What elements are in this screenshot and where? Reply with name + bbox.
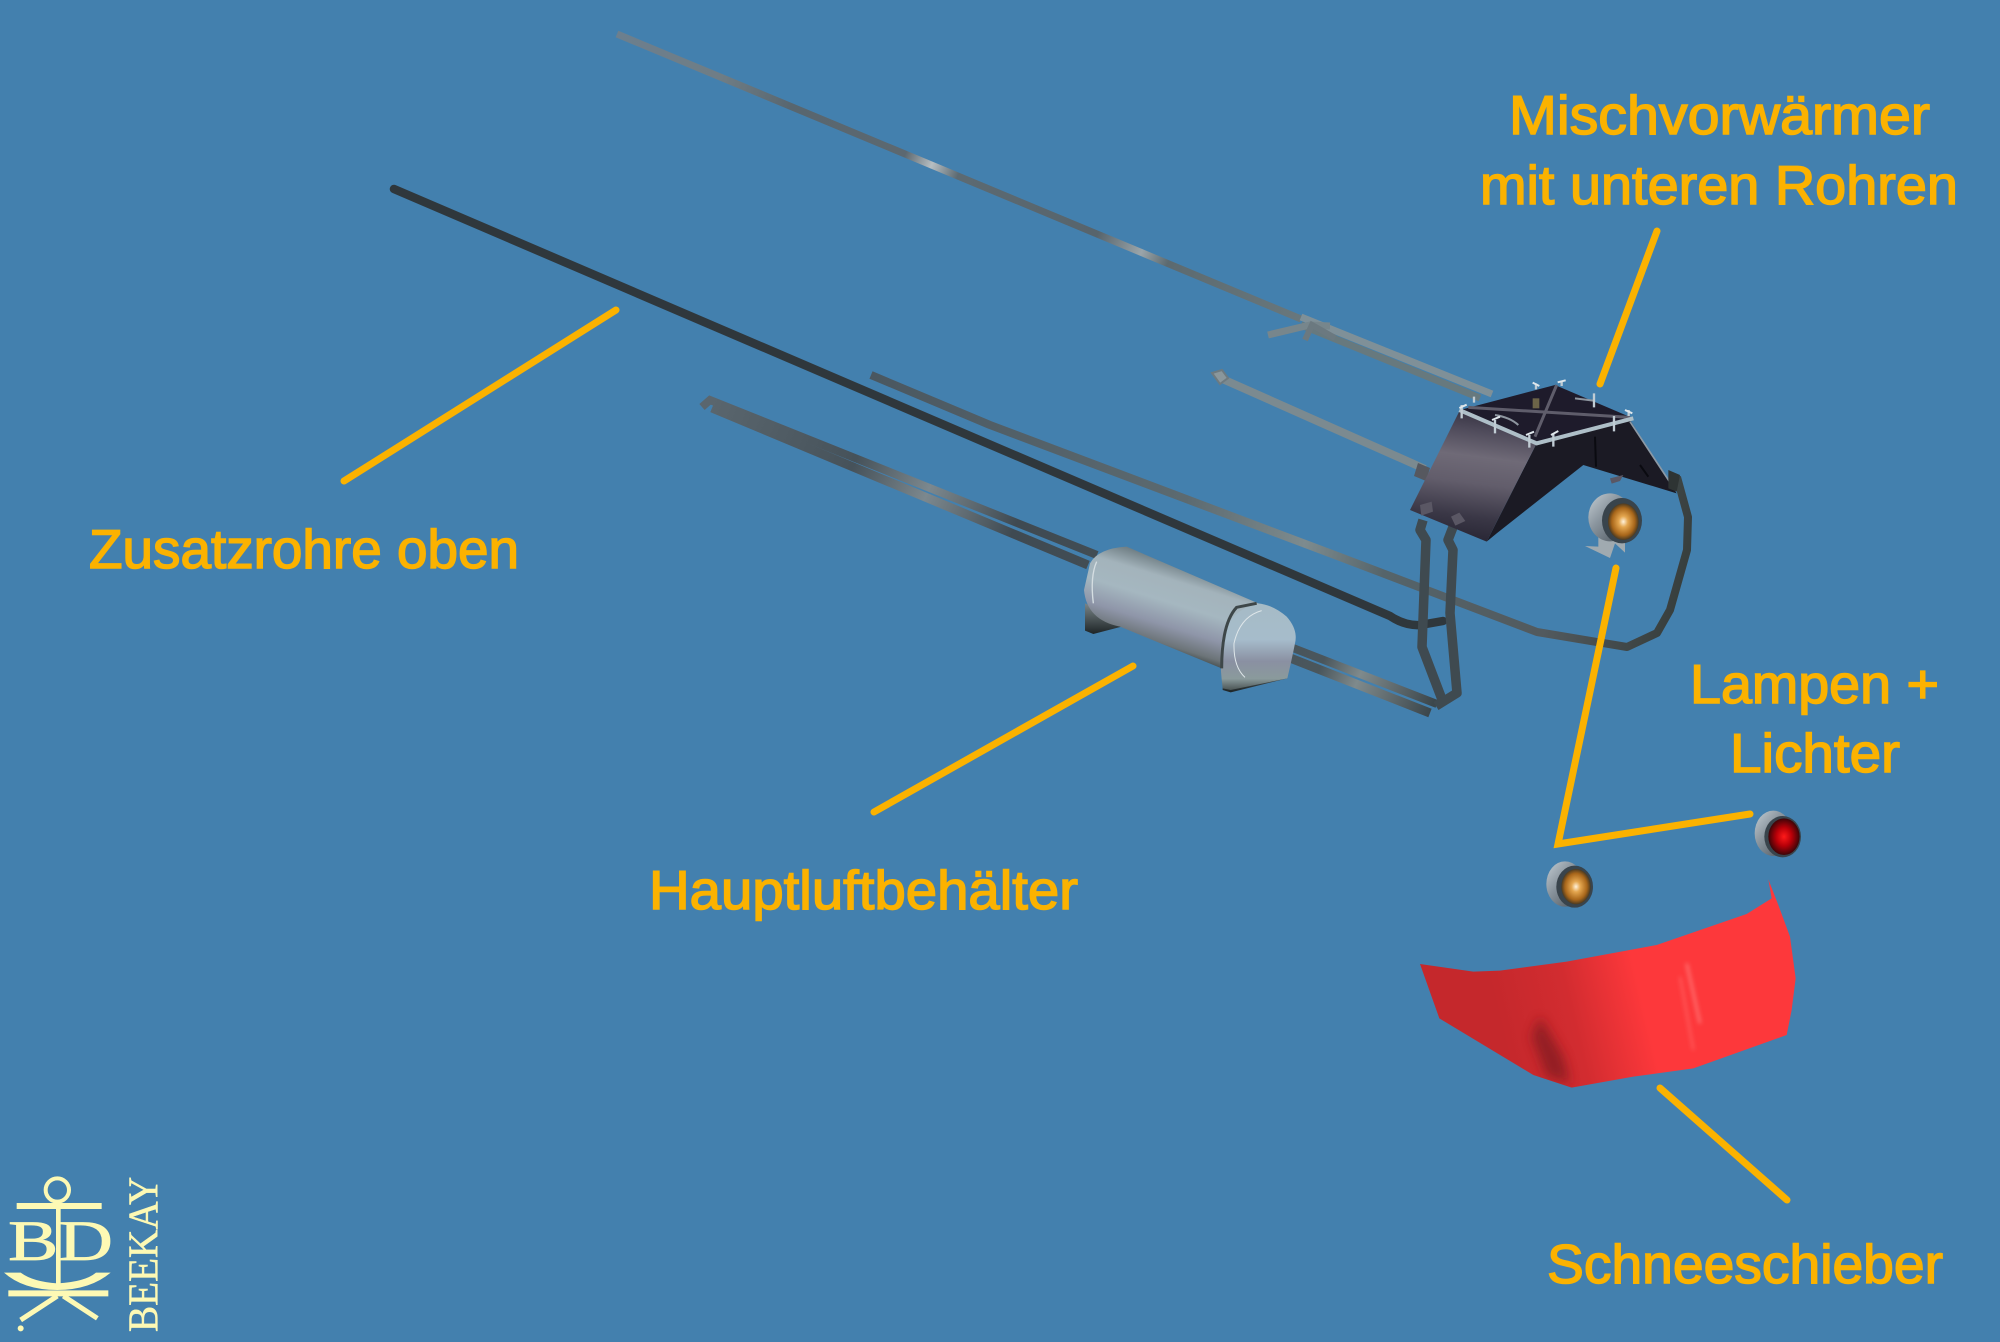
leader line: Mischvorwärmer	[1600, 231, 1657, 384]
label: Hauptluftbehälter: Hauptluftbehälter	[649, 859, 1078, 921]
leader line: Schneeschieber	[1660, 1088, 1787, 1200]
pipe flanges	[1420, 470, 1680, 526]
label: Mischvorwärmer	[1480, 84, 1958, 216]
amber lamp on bracket	[1585, 493, 1642, 558]
label: Lampen + Lichter: Lampen +	[1690, 653, 1939, 715]
top additional pipe	[617, 34, 1492, 398]
label: Lampen + Lichter	[1690, 653, 1939, 784]
label: Schneeschieber: Schneeschieber	[1547, 1233, 1943, 1295]
preheater frame	[1459, 380, 1675, 490]
down tubes from preheater	[1420, 520, 1457, 706]
main air reservoir	[1084, 547, 1296, 692]
preheater top	[1460, 385, 1633, 443]
preheater side panel	[1410, 410, 1537, 542]
short pipe with end fitting	[1212, 370, 1430, 481]
leader line: Zusatzrohre oben	[344, 310, 616, 481]
lower double pipe	[702, 400, 1437, 713]
label: Mischvorwärmer: Mischvorwärmer	[1509, 84, 1930, 146]
amber lamp	[1546, 861, 1593, 908]
dark upper pipe	[394, 189, 1443, 625]
red lamp	[1755, 811, 1801, 857]
label: Mischvorwärmer: mit unteren Rohren	[1480, 154, 1958, 216]
label: Lampen + Lichter: Lichter	[1730, 722, 1900, 784]
logo: BD anchor	[4, 1177, 167, 1332]
snow plough	[1420, 879, 1796, 1088]
leader line: Lampen + Lichter	[1558, 568, 1750, 844]
logo: BD anchor: BEEKAY	[120, 1177, 167, 1332]
thin middle pipe	[871, 375, 1688, 647]
preheater underside	[1487, 420, 1677, 542]
label: Zusatzrohre oben: Zusatzrohre oben	[89, 518, 519, 580]
leader line: Hauptluftbehälter	[874, 666, 1133, 812]
logo: BD anchor: BD	[8, 1210, 113, 1273]
preheater with wing nuts	[1410, 380, 1680, 542]
